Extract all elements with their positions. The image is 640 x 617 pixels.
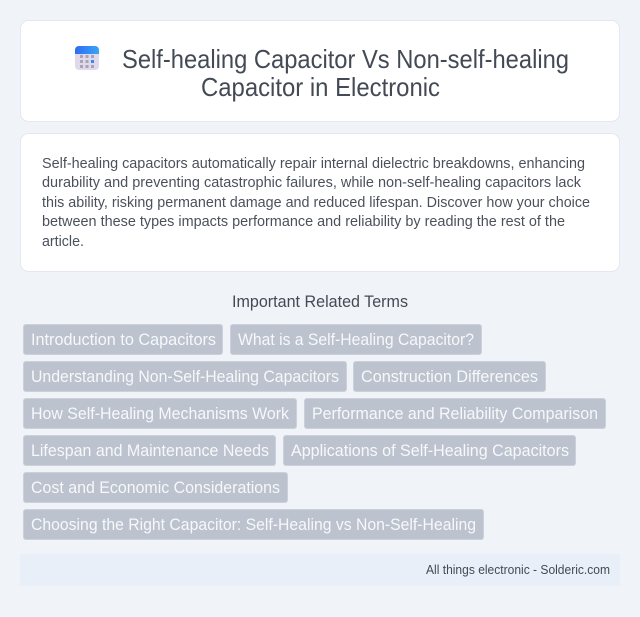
tag: Introduction to Capacitors xyxy=(31,330,216,349)
heading: related terms: Important Related Terms xyxy=(232,293,408,311)
tag: Applications of Self-Healing Capacitors xyxy=(291,441,569,460)
tag: Cost and Economic Considerations xyxy=(31,478,280,497)
panel: tag list xyxy=(24,324,606,540)
text block: summary: article. xyxy=(42,233,84,250)
panel: summary xyxy=(20,134,620,272)
tag xyxy=(304,398,606,428)
title: Self-healing Capacitor Vs Non-self-healing xyxy=(122,44,569,74)
tag xyxy=(284,436,576,466)
text block: summary: durability and preventing catastrophic failures, while non-self-healing capacitors lack xyxy=(42,174,581,191)
tag: What is a Self-Healing Capacitor? xyxy=(238,330,474,349)
tag: Construction Differences xyxy=(361,367,538,386)
icon: calendar xyxy=(75,46,99,70)
tag xyxy=(24,436,276,466)
text block: summary xyxy=(42,155,590,250)
tag: Choosing the Right Capacitor: Self-Healing vs Non-Self-Healing xyxy=(31,515,476,534)
tag xyxy=(24,324,222,354)
tag: Lifespan and Maintenance Needs xyxy=(31,441,269,460)
footer bar xyxy=(20,554,620,586)
text block: summary: between these types impacts performance and reliability by reading the rest of the xyxy=(42,213,565,230)
panel: title card xyxy=(20,20,620,122)
title: Capacitor in Electronic xyxy=(201,72,440,102)
tag xyxy=(230,324,482,354)
title xyxy=(122,44,569,102)
tag: Understanding Non-Self-Healing Capacitors xyxy=(31,367,339,386)
tag xyxy=(24,362,346,392)
tag: Performance and Reliability Comparison xyxy=(312,404,598,423)
footer credit: All things electronic - Solderic.com xyxy=(426,562,610,577)
tag xyxy=(354,362,546,392)
tag xyxy=(24,510,484,540)
tag xyxy=(24,398,296,428)
tag: How Self-Healing Mechanisms Work xyxy=(31,404,290,423)
text block: summary: Self-healing capacitors automatically repair internal dielectric breakdowns, enhancing xyxy=(42,155,585,172)
text block: summary: this ability, risking permanent damage and reduced lifespan. Discover how your choice xyxy=(42,194,590,211)
tag xyxy=(24,472,288,502)
